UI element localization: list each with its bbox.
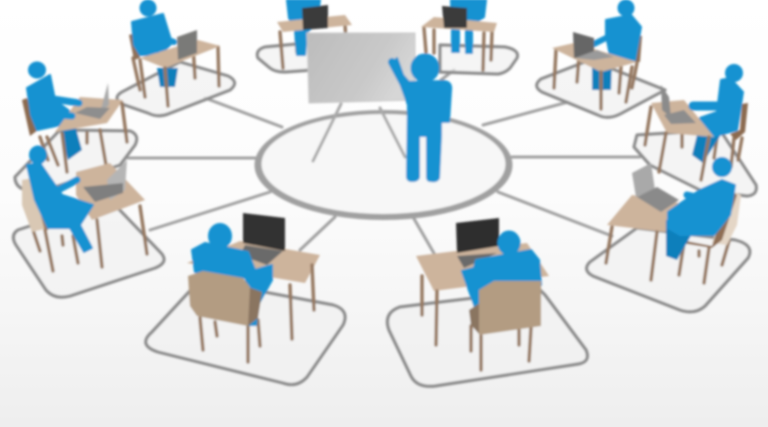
station: back centre left bbox=[257, 0, 352, 72]
presenter figure bbox=[392, 54, 451, 181]
connector lines bbox=[128, 70, 640, 255]
station: back centre right bbox=[421, 0, 518, 74]
station: front right bbox=[387, 218, 587, 386]
station: back left bbox=[117, 0, 235, 116]
station: left front bbox=[13, 146, 164, 297]
station: right rear bbox=[634, 65, 756, 196]
station: front left bbox=[146, 213, 345, 385]
whiteboard bbox=[307, 33, 415, 161]
station: back right bbox=[537, 0, 665, 117]
station: right front bbox=[587, 158, 750, 312]
station: left rear bbox=[15, 62, 137, 192]
central ring bbox=[254, 110, 512, 220]
